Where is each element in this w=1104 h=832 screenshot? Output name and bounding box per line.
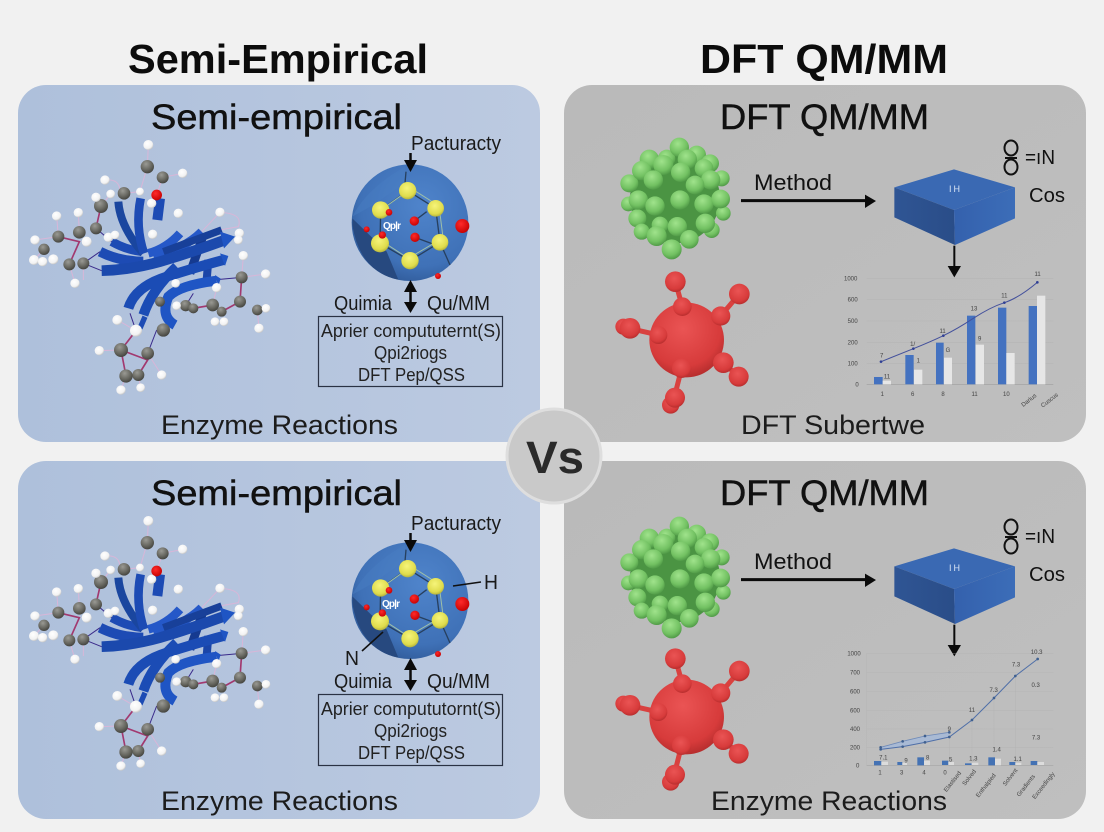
line chart with small bars: 0 [943, 771, 947, 777]
bar and line chart: 11 [940, 329, 946, 335]
line chart with small bars: 7.3 [1032, 736, 1041, 742]
text box: DFT Pep/QSS [358, 743, 465, 763]
line chart with small bars: Elastised [943, 771, 963, 793]
Vs badge [507, 409, 601, 503]
label: Method: Method [754, 549, 832, 574]
line chart with small bars: Solved [962, 769, 978, 787]
text box: Aprier compututornt(S) [321, 699, 501, 719]
bar and line chart: 200 [848, 340, 858, 346]
line chart with small bars: 3 [900, 771, 904, 777]
line chart with small bars: 0.3 [1032, 683, 1040, 689]
caption: Enzyme Reactions [161, 410, 398, 440]
line chart with small bars: 10.3 [1031, 650, 1043, 656]
line chart with small bars: Solvent [1002, 768, 1020, 787]
blue cube with arrows [741, 548, 1015, 656]
line chart with small bars: 1.1 [1014, 757, 1022, 763]
Vs badge: Vs [526, 432, 584, 483]
label: N with leader [345, 632, 383, 670]
text box [318, 694, 502, 766]
label and arrow: Pacturacty: Pacturacty [411, 513, 501, 535]
bar and line chart: 1000 [844, 276, 858, 282]
red molecule [615, 648, 750, 791]
bar and line chart: 600 [848, 297, 858, 303]
panel: DFT QM/MM bottom [564, 461, 1086, 819]
label: H with leader: H [484, 572, 498, 594]
label: Quimia: Quimia [334, 293, 393, 315]
blue sphere molecule [352, 542, 469, 659]
line chart with small bars: 0 [856, 764, 860, 770]
green cluster [620, 517, 731, 638]
line chart with small bars: 600 [850, 690, 861, 696]
heading: DFT QM/MM [720, 474, 929, 513]
bar and line chart: Darius [1021, 393, 1038, 409]
title: Semi-Empirical: Semi-Empirical [128, 36, 428, 82]
text box [318, 316, 502, 386]
cube label: I H [949, 563, 960, 573]
bar and line chart: 11 [884, 374, 891, 380]
line chart with small bars: 400 [850, 727, 861, 733]
bar and line chart: 11 [1035, 272, 1041, 278]
panel: semi-empirical top [18, 85, 540, 442]
double arrow [404, 658, 417, 691]
blue sphere molecule: Qp|r [383, 221, 401, 232]
heading: Semi-empirical [151, 474, 402, 513]
label: Method: Method [754, 170, 832, 195]
line chart with small bars [847, 650, 1057, 801]
bar and line chart: 1/ [910, 342, 915, 348]
bar and line chart: Cuscus [1040, 392, 1060, 409]
line chart with small bars: Gradients [1016, 774, 1037, 798]
bar and line chart: 100 [848, 361, 858, 367]
line chart with small bars: 9 [948, 727, 952, 733]
line chart with small bars: 1.4 [993, 748, 1001, 754]
text box: DFT Pep/QSS [358, 365, 465, 385]
line chart with small bars: 200 [850, 745, 861, 751]
protein molecule [29, 140, 270, 395]
line chart with small bars: 7.3 [1012, 663, 1021, 669]
bar and line chart: 10 [1003, 392, 1010, 398]
blue sphere molecule [352, 164, 469, 281]
heading: Semi-empirical [151, 98, 402, 137]
title: DFT QM/MM: DFT QM/MM [700, 36, 948, 82]
formula icon [1004, 520, 1055, 554]
label and arrow: Pacturacty [404, 513, 501, 552]
label and arrow: Pacturacty: Pacturacty [411, 133, 501, 155]
panel: DFT QM/MM top [564, 85, 1086, 442]
line chart with small bars: 1 [878, 771, 882, 777]
label: Qu/MM: Qu/MM [427, 293, 490, 315]
blue cube with arrows [741, 169, 1015, 277]
bar and line chart: 11 [1001, 294, 1008, 300]
caption: Enzyme Reactions [711, 786, 947, 816]
bar and line chart: 500 [848, 319, 858, 325]
double arrow [404, 280, 417, 313]
bar and line chart: 9 [978, 337, 982, 343]
formula icon: =ıN [1025, 147, 1055, 169]
line chart with small bars: 11 [969, 708, 976, 714]
text box: Qpi2riogs [374, 343, 447, 363]
text box: Aprier compututernt(S) [321, 321, 501, 341]
protein molecule [29, 516, 270, 771]
line chart with small bars: 7.1 [879, 755, 888, 761]
formula icon: =ıN [1025, 526, 1055, 548]
green cluster [620, 138, 731, 259]
line chart with small bars: 8 [926, 755, 930, 761]
bar and line chart [844, 272, 1060, 409]
cube label: I H [949, 184, 960, 194]
bar and line chart: 11 [972, 392, 978, 398]
label: Quimia: Quimia [334, 671, 393, 693]
bar and line chart: 8 [941, 392, 945, 398]
line chart with small bars: 1000 [847, 651, 861, 657]
label: Qu/MM: Qu/MM [427, 671, 490, 693]
label: Cos: Cos [1029, 185, 1065, 207]
panel: semi-empirical bottom [18, 461, 540, 819]
bar and line chart: 1 [917, 359, 921, 365]
bar and line chart: 7 [880, 354, 884, 360]
line chart with small bars: 9 [904, 758, 908, 764]
line chart with small bars: 7.3 [990, 688, 998, 694]
red molecule [615, 271, 750, 414]
line chart with small bars: Enthalpied [975, 773, 998, 799]
text box: Qpi2riogs [374, 721, 447, 741]
bar and line chart: 13 [971, 306, 978, 312]
caption: DFT Subertwe [741, 410, 925, 440]
caption: Enzyme Reactions [161, 786, 398, 816]
bar and line chart: G [946, 348, 951, 354]
label: N with leader: N [345, 648, 359, 670]
line chart with small bars: 1.3 [969, 756, 978, 762]
heading: DFT QM/MM [720, 98, 929, 137]
line chart with small bars: 5 [949, 758, 953, 764]
label: Cos: Cos [1029, 564, 1065, 586]
line chart with small bars: 700 [850, 671, 861, 677]
label: H with leader [453, 572, 498, 594]
label and arrow: Pacturacty [404, 133, 501, 172]
bar and line chart: 0 [855, 382, 859, 388]
line chart with small bars: 4 [922, 771, 926, 777]
line chart with small bars: 600 [850, 708, 861, 714]
bar and line chart: 6 [911, 392, 915, 398]
formula icon [1004, 140, 1055, 174]
blue sphere molecule: Qp|r [382, 599, 400, 610]
bar and line chart: 1 [881, 392, 885, 398]
line chart with small bars: Exceedingly [1032, 771, 1057, 801]
